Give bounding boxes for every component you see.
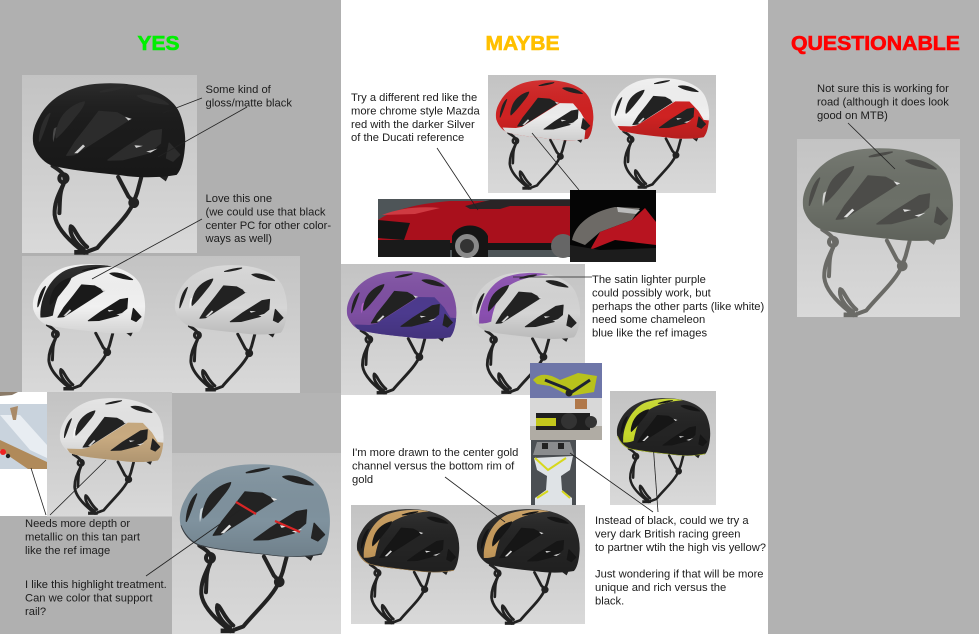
photo: black helmet with gold channel and rim <box>351 505 470 624</box>
arrow: white helmet black centre <box>92 219 202 279</box>
note: highlight treatment: I like this highlight treatment. <box>25 579 167 591</box>
photo: black helmet with high-vis yellow <box>610 391 716 505</box>
note: tan part depth: metallic on this tan part <box>25 531 141 543</box>
arrow: to purple channel <box>513 276 592 278</box>
reference image: tan metallic part <box>0 392 47 516</box>
heading: QUESTIONABLE: QUESTIONABLE <box>791 33 960 55</box>
note: satin purple: could possibly work, but <box>592 287 712 299</box>
arrow: gloss black shell <box>163 98 202 113</box>
note: British racing green: Just wondering if that will be more <box>595 569 764 581</box>
reference image: red Mazda <box>378 199 575 258</box>
note: gloss/matte black: Some kind of <box>206 84 272 96</box>
note: British racing green: black. <box>595 595 624 607</box>
photo: black helmet with gold channel <box>470 505 585 625</box>
note: centre gold channel: channel versus the bottom rim of <box>352 460 515 472</box>
heading: MAYBE: MAYBE <box>486 33 560 55</box>
note: different red: of the Ducati reference <box>351 132 464 144</box>
note: centre gold channel: I'm more drawn to the center gold <box>352 447 518 459</box>
arrow: to race car reference <box>570 453 653 512</box>
note: love this one: center PC for other color- <box>206 220 331 232</box>
note: highlight treatment: rail? <box>25 606 46 618</box>
note: different red: Try a different red like the <box>351 92 477 104</box>
panel: maybe column background <box>341 0 768 634</box>
photo: red helmet with white cross band <box>488 75 603 193</box>
panel: questionable column background <box>768 0 979 634</box>
note: different red: red with the darker Silver <box>351 119 475 131</box>
photo: white helmet with red cross band <box>603 75 716 193</box>
photo: grey-green helmet <box>797 139 960 317</box>
photo: black helmet <box>22 75 197 255</box>
heading: YES: YES <box>138 33 180 55</box>
arrow: matte black rear <box>158 107 247 157</box>
reference image: yellow race car, three views <box>530 363 602 505</box>
photo: blue-grey helmet with red rail <box>172 393 341 634</box>
photo: white helmet with black centre <box>22 256 162 393</box>
arrow: to black shell <box>653 443 658 512</box>
arrow: to Ducati reference <box>532 133 579 190</box>
note: tan part depth: Needs more depth or <box>25 518 130 530</box>
note: road versus MTB: good on MTB) <box>817 110 888 122</box>
note: satin purple: blue like the ref images <box>592 328 707 340</box>
photo: purple helmet <box>341 264 463 395</box>
photo: matte white helmet <box>162 256 300 393</box>
panel: yes column background <box>0 0 341 634</box>
arrow: to tan part <box>50 460 106 515</box>
note: love this one: (we could use that black <box>206 206 326 218</box>
arrow: to tan reference image <box>31 468 46 515</box>
note: centre gold channel: gold <box>352 474 373 486</box>
photo: white helmet with purple channel <box>463 264 585 395</box>
arrow: to support rail <box>146 510 240 576</box>
note: British racing green: Instead of black, could we try a <box>595 515 749 527</box>
arrow: to grey-green shell <box>848 123 895 169</box>
note: tan part depth: like the ref image <box>25 545 110 557</box>
note: road versus MTB: road (although it does look <box>817 96 949 108</box>
note: satin purple: The satin lighter purple <box>592 274 706 286</box>
note: satin purple: need some chameleon <box>592 314 705 326</box>
note: gloss/matte black: gloss/matte black <box>206 97 292 109</box>
note: British racing green: unique and rich versus the <box>595 582 726 594</box>
note: satin purple: perhaps the other parts (like white) <box>592 301 765 313</box>
note: love this one: Love this one <box>206 193 272 205</box>
note: different red: more chrome style Mazda <box>351 105 480 117</box>
note: highlight treatment: Can we color that support <box>25 592 153 604</box>
note: British racing green: to partner wtih the high vis yellow? <box>595 542 766 554</box>
note: British racing green: very dark British racing green <box>595 528 740 540</box>
note: love this one: ways as well) <box>204 233 272 245</box>
arrow: to centre gold channel <box>445 477 505 522</box>
note: road versus MTB: Not sure this is working for <box>817 83 949 95</box>
arrow: to Mazda reference <box>437 148 478 210</box>
photo: white and tan helmet <box>47 392 172 516</box>
reference image: Ducati tank <box>570 190 656 262</box>
